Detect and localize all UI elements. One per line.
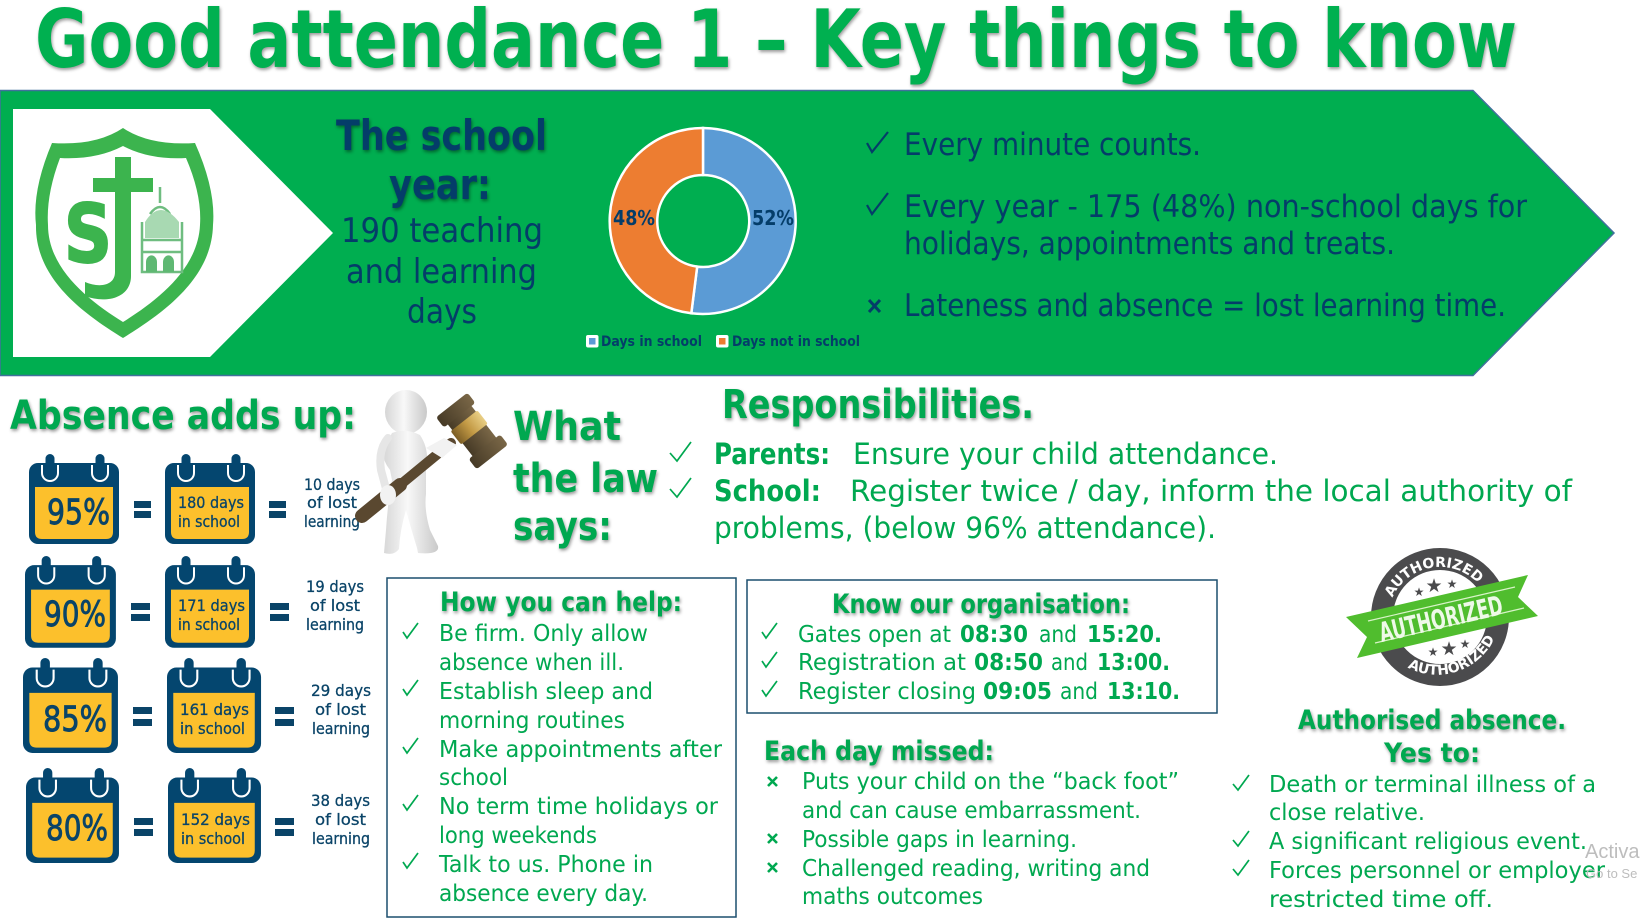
row: 90 percent [25,556,364,648]
list: authorised reasons: restricted time off. [1269,887,1493,913]
list: gate times: 08:50 [974,650,1043,676]
heading: each day missed: Each day missed: [764,736,994,767]
list: key facts: Every minute counts. [904,127,1201,163]
chart legend [586,334,860,350]
row: 80 percent: of lost [315,810,366,829]
heading: what the law says [513,404,658,550]
row: 85 percent: 161 days [180,700,249,719]
list: help items: absence every day. [439,881,648,907]
list: gate times: 09:05 [983,679,1052,705]
list: authorised reasons: Death or terminal illness of a [1269,772,1596,798]
heading: authorised absence [1298,705,1566,769]
list: consequences: Possible gaps in learning. [802,827,1077,853]
list: gate times: 13:00. [1097,650,1170,676]
row: 85 percent: in school [180,719,245,738]
row: 90 percent: 90% [44,595,106,635]
heading: what the law says: says: [513,504,612,550]
row: 95 percent: 95% [47,493,110,533]
list: consequences: and can cause embarrassment. [802,798,1141,824]
panel: know our organisation [747,580,1217,713]
list: key facts: Lateness and absence = lost learning time. [904,288,1506,324]
text: responsibilities list: Ensure your child attendance. [853,437,1278,471]
list: key facts: Every year - 175 (48%) non-school days for [904,189,1527,225]
row: 80 percent: learning [312,829,370,848]
heading: authorised absence: Authorised absence. [1298,705,1566,736]
list: authorised reasons [1233,772,1606,913]
icon: figure with gavel [362,390,508,554]
icon: authorized stamp: ★ [1440,638,1458,660]
list: gate times: and [1051,650,1088,676]
heading: how you can help: How you can help: [440,587,682,618]
row: 95 percent: 10 days [304,475,360,494]
list: consequences: Puts your child on the “back foot” [802,769,1179,795]
list: gate times: and [1039,622,1077,648]
row: 80 percent: 38 days [311,791,370,810]
list: gate times: Register closing [798,679,976,705]
text: responsibilities list [670,437,1573,545]
banner arrow [0,90,1614,376]
row: 80 percent [26,768,370,863]
list: help items: Make appointments after [439,737,723,763]
text: responsibilities list: Parents: [714,437,830,471]
heading: the school year: year: [389,160,491,209]
donut chart: 52% [752,206,794,230]
watermark: activation text: Activa [1585,841,1640,863]
list: help items [403,621,723,907]
text: teaching days: and learning [346,252,537,292]
watermark: activation text: Go to Se [1586,866,1637,881]
row: 90 percent: of lost [310,596,360,615]
list: gate times: Registration at [798,650,966,676]
row: 85 percent: 85% [43,700,107,740]
list: consequences: Challenged reading, writing and [802,856,1150,882]
row: 95 percent: in school [178,512,240,531]
list: help items: absence when ill. [439,650,624,676]
icon: school shield logo: S [64,188,112,281]
logo pentagon [13,109,333,357]
icon: authorized stamp: AUTHORIZED [1408,636,1493,675]
heading: responsibilities: Responsibilities. [722,382,1034,428]
list: help items: morning routines [439,708,625,734]
icon: authorized stamp [1346,548,1538,686]
heading: the school year: The school [336,111,547,160]
list: gate times [762,622,1180,705]
text: teaching days [341,211,543,332]
list: gate times: 08:30 [960,622,1028,648]
row: 85 percent: of lost [315,700,366,719]
row: 95 percent: learning [304,512,360,531]
text: teaching days: days [407,292,477,332]
panel: how you can help [387,578,736,917]
panel: each day missed [764,736,1179,910]
panel: school year banner [0,90,1614,376]
text: teaching days: 190 teaching [341,211,543,251]
panel: authorised absence [1233,705,1606,913]
donut chart [610,128,796,314]
text: responsibilities list: Register twice / day, inform the local authority of [850,474,1573,508]
row: 80 percent: 80% [46,809,108,849]
chart legend: Days not in school [732,334,860,350]
heading: authorised absence: Yes to: [1383,738,1480,769]
icon: authorized stamp: AUTHORIZED [1385,556,1482,598]
list: key facts [867,127,1527,324]
icon: authorized stamp: AUTHORIZED [1376,590,1506,649]
list: authorised reasons: Forces personnel or employer [1269,858,1606,884]
list: gate times: Gates open at [798,622,951,648]
row: 95 percent: 180 days [178,493,244,512]
watermark: activation text [1585,841,1640,881]
icon: authorized stamp: ★ [1414,585,1424,599]
icon: school shield logo [35,128,213,338]
list: gate times: and [1060,679,1098,705]
list: key facts: holidays, appointments and treats. [904,226,1395,262]
row: 85 percent: learning [312,719,370,738]
row: 90 percent: learning [306,615,364,634]
icon: authorized stamp: ★ [1447,577,1457,591]
icon: authorized stamp: ★ [1428,645,1438,659]
list: help items: long weekends [439,823,597,849]
list: gate times: 13:10. [1107,679,1180,705]
list: help items: No term time holidays or [439,794,719,820]
heading: what the law says: the law [513,456,658,502]
heading: what the law says: What [513,404,621,450]
list: consequences [768,769,1179,910]
row: 85 percent: 29 days [311,681,371,700]
text: responsibilities list: problems, (below 96% attendance). [714,511,1216,545]
list: help items: Establish sleep and [439,679,653,705]
text: responsibilities list: School: [714,474,821,508]
row: 90 percent: 19 days [306,577,364,596]
row: 80 percent: in school [181,829,245,848]
chart legend: Days in school [601,334,702,350]
list: authorised reasons: close relative. [1269,800,1425,826]
list: help items: school [439,765,508,791]
row: 95 percent: of lost [307,493,357,512]
list: gate times: 15:20. [1087,622,1162,648]
row: 80 percent: 152 days [181,810,250,829]
heading: know our organisation: Know our organisation: [832,589,1130,620]
icon: authorized stamp: ★ [1425,575,1443,597]
list: help items: Be firm. Only allow [439,621,648,647]
list: authorised reasons: A significant religious event. [1269,829,1587,855]
row: 90 percent: in school [178,615,240,634]
donut chart: 48% [613,206,655,230]
panel: absence calendars [23,454,371,863]
row: 85 percent [23,658,371,753]
row: 90 percent: 171 days [178,596,245,615]
list: consequences: maths outcomes [802,884,983,910]
icon: authorized stamp: ★ [1460,637,1470,651]
heading: absence adds up: Absence adds up: [10,393,356,439]
heading: the school year [336,111,547,209]
list: help items: Talk to us. Phone in [438,852,653,878]
row: 95 percent [29,454,360,544]
